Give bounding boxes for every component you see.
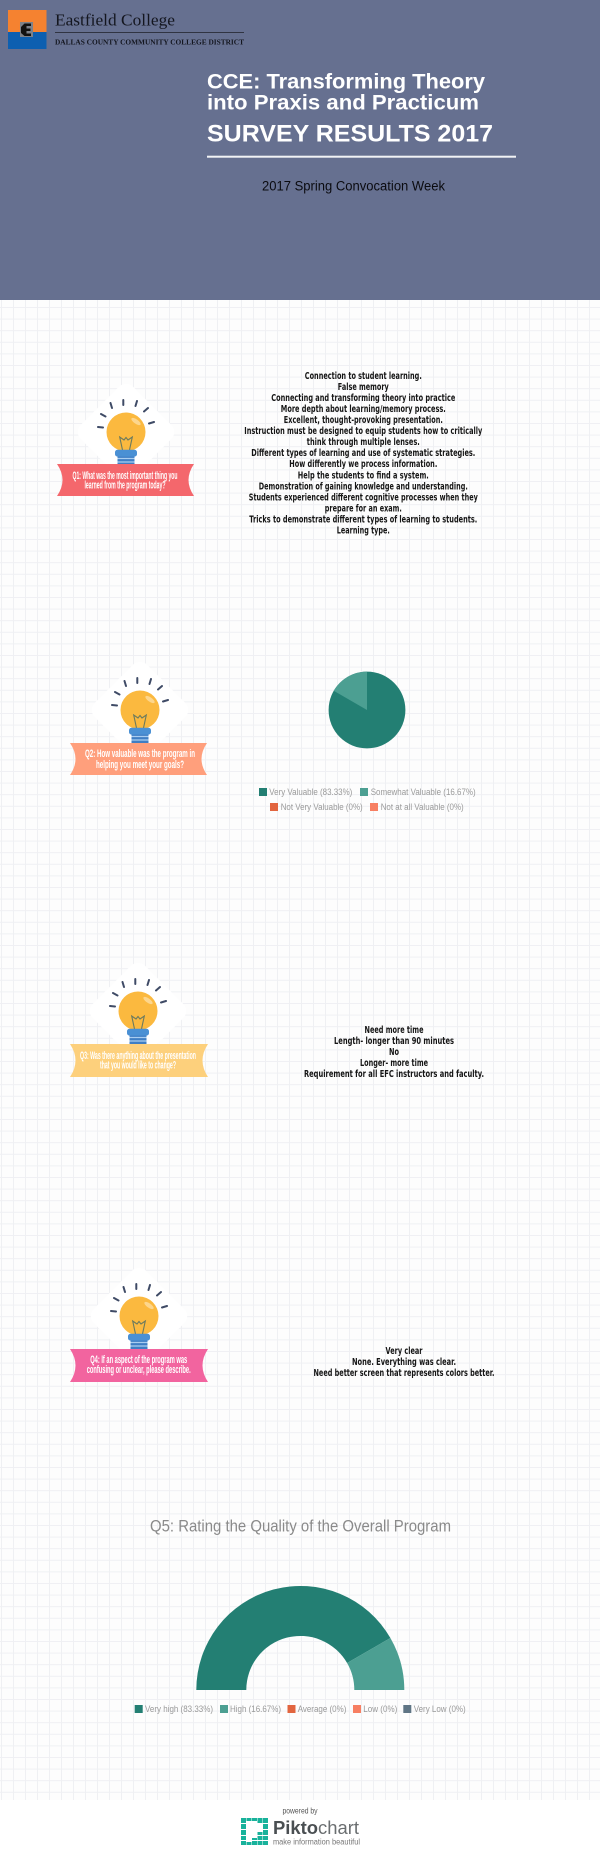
title: SURVEY RESULTS 2017 xyxy=(207,121,493,148)
footer: Piktochart branding: powered by xyxy=(282,1806,318,1816)
ribbon: question 4: confusing or unclear, please describe. xyxy=(87,1364,191,1376)
ribbon: question 1: learned from the program today? xyxy=(84,480,166,492)
text block: question 3 responses xyxy=(304,1025,484,1080)
college logo: DALLAS COUNTY COMMUNITY COLLEGE DISTRICT xyxy=(55,38,244,46)
legend: program value: Not at all Valuable (0%) xyxy=(381,802,464,812)
text block: question 1 responses: think through multiple lenses. xyxy=(307,437,420,448)
ribbon: question 2: helping you meet your goals? xyxy=(96,759,184,771)
text block: question 1 responses: Connection to student learning. xyxy=(305,371,422,382)
ribbon: question 1 xyxy=(57,464,194,496)
legend: program value: Not Very Valuable (0%) xyxy=(281,802,363,812)
tagline: make information beautiful xyxy=(273,1838,360,1846)
legend: overall quality: Very high (83.33%) xyxy=(145,1704,213,1714)
wordmark: Piktochart: Piktochart xyxy=(273,1818,359,1838)
heading: question 5: Q5: Rating the Quality of the Overall Program xyxy=(150,1516,451,1536)
ribbon: question 4 xyxy=(70,1349,208,1382)
ribbon: question 1: Q1: What was the most important thing you xyxy=(72,470,178,482)
text block: question 1 responses: Learning type. xyxy=(337,525,390,536)
text block: question 1 responses: How differently we process information. xyxy=(289,459,437,470)
icon: light bulb xyxy=(88,658,192,762)
legend: program value: Very Valuable (83.33%) xyxy=(269,787,352,797)
icon: light bulb xyxy=(86,959,190,1063)
semi-donut chart: overall quality xyxy=(196,1586,404,1690)
panel: question 4 xyxy=(70,1264,494,1382)
icon: Piktochart logo xyxy=(241,1818,268,1845)
panel: question 1 xyxy=(57,371,483,536)
legend: program value: Somewhat Valuable (16.67%) xyxy=(371,787,476,797)
subtitle: 2017 Spring Convocation Week xyxy=(262,179,445,194)
icon: light bulb xyxy=(87,1264,191,1368)
text block: question 4 responses: None. Everything was clear. xyxy=(352,1357,456,1368)
legend: overall quality: High (16.67%) xyxy=(230,1704,281,1714)
ribbon: question 3: that you would like to change? xyxy=(100,1060,176,1072)
text block: question 1 responses: More depth about learning/memory process. xyxy=(281,404,446,415)
text block: question 4 responses xyxy=(314,1346,494,1379)
legend: overall quality: Very Low (0%) xyxy=(414,1704,466,1714)
text block: question 3 responses: Length- longer than 90 minutes xyxy=(334,1036,454,1047)
footer: Piktochart branding xyxy=(0,1800,600,1853)
text block: question 1 responses: Instruction must be designed to equip students how to critically xyxy=(244,426,483,437)
title: CCE: Transforming Theory xyxy=(207,70,485,94)
ribbon: question 2 xyxy=(70,743,207,775)
text block: question 1 responses: Different types of learning and use of systematic strategies. xyxy=(251,448,475,459)
title: into Praxis and Practicum xyxy=(207,92,479,114)
text block: question 1 responses: Help the students to find a system. xyxy=(298,470,429,481)
text block: question 1 responses: False memory xyxy=(338,382,389,393)
text block: question 1 responses: Connecting and transforming theory into practice xyxy=(271,393,455,404)
text block: question 1 responses: Tricks to demonstrate different types of learning to students. xyxy=(249,514,477,525)
ribbon: question 2: Q2: How valuable was the program in xyxy=(85,748,195,760)
legend: program value xyxy=(259,787,476,812)
title xyxy=(207,70,493,148)
text block: question 4 responses: Very clear xyxy=(386,1346,423,1357)
legend: overall quality: Average (0%) xyxy=(298,1704,346,1714)
ribbon: question 4: Q4: If an aspect of the program was xyxy=(90,1354,187,1366)
legend: overall quality xyxy=(135,1704,466,1714)
text block: question 3 responses: No xyxy=(389,1047,399,1058)
text block: question 1 responses: prepare for an exam. xyxy=(325,503,402,514)
text block: question 1 responses xyxy=(244,371,483,536)
panel: question 3 xyxy=(70,959,484,1080)
text block: question 3 responses: Need more time xyxy=(364,1025,424,1036)
ribbon: question 3: Q3: Was there anything about the presentation xyxy=(80,1050,196,1062)
panel: question 5 xyxy=(135,1516,466,1714)
text block: question 4 responses: Need better screen that represents colors better. xyxy=(314,1368,494,1379)
text block: question 3 responses: Requirement for all EFC instructors and faculty. xyxy=(304,1069,484,1080)
header banner xyxy=(0,0,600,300)
pie chart: program value xyxy=(329,672,405,748)
panel: question 2 xyxy=(70,658,476,812)
text block: question 3 responses: Longer- more time xyxy=(360,1058,428,1069)
text block: question 1 responses: Demonstration of gaining knowledge and understanding. xyxy=(259,481,468,492)
college logo: Eastfield College xyxy=(55,10,175,30)
text block: question 1 responses: Students experienced different cognitive processes when they xyxy=(249,492,478,503)
text block: question 1 responses: Excellent, thought-provoking presentation. xyxy=(284,415,443,426)
ribbon: question 3 xyxy=(70,1044,208,1077)
icon: light bulb xyxy=(74,380,178,484)
college logo xyxy=(8,10,244,49)
legend: overall quality: Low (0%) xyxy=(363,1704,397,1714)
